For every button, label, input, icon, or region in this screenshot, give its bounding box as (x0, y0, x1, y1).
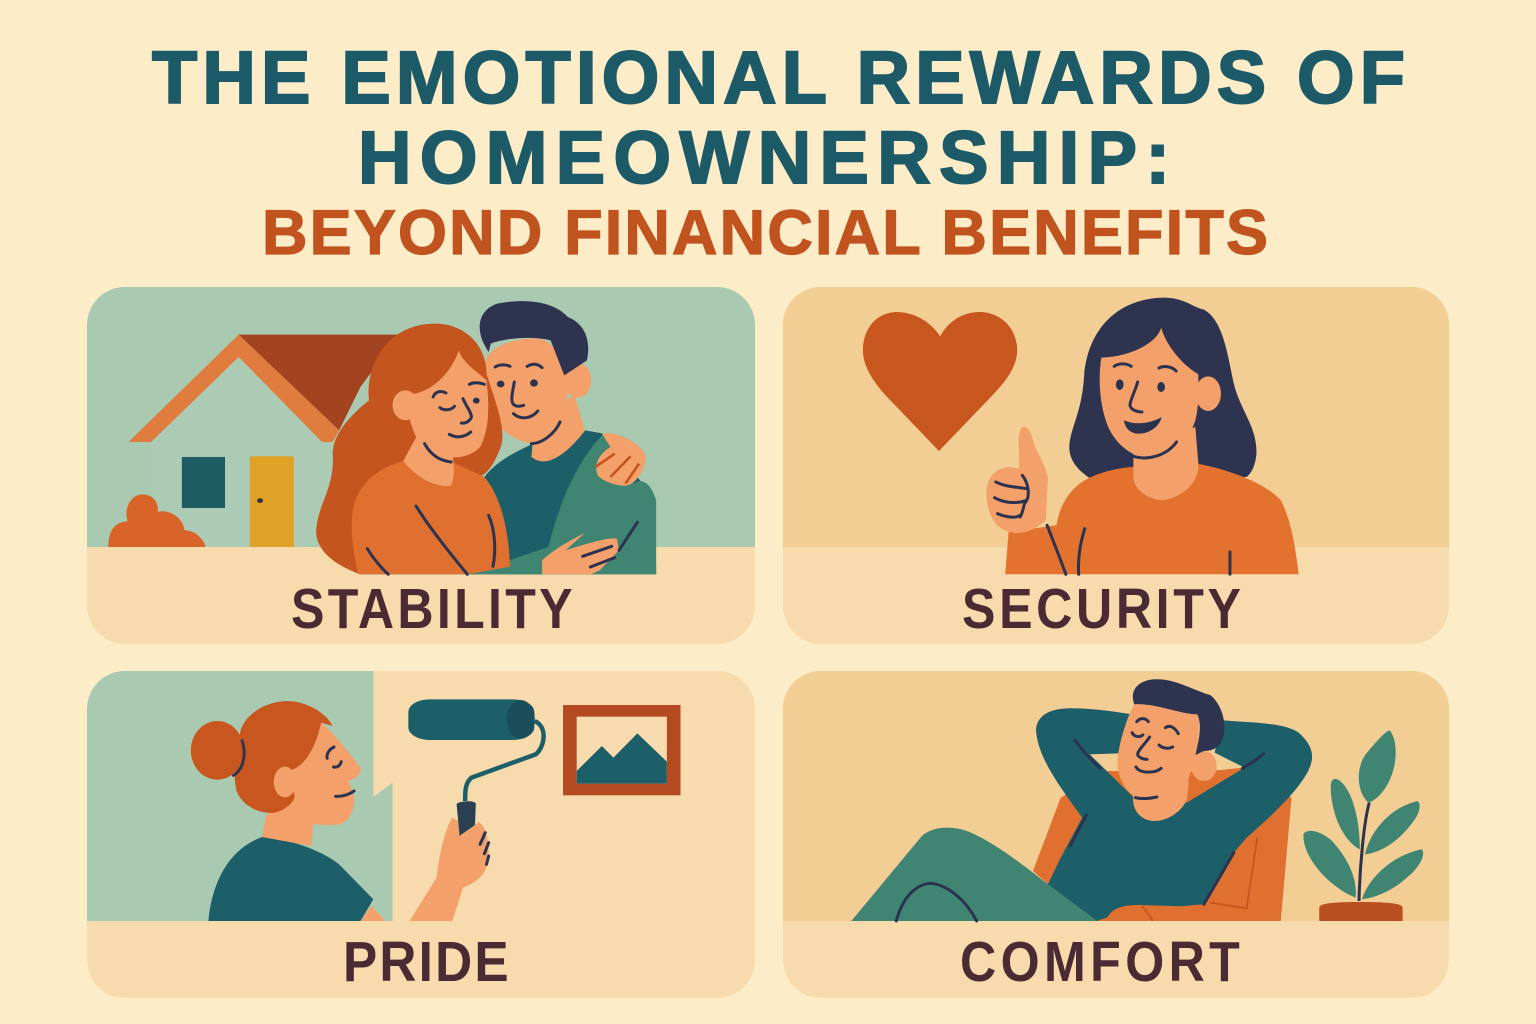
label: comfort: COMFORT (960, 930, 1240, 994)
panel: security (783, 287, 1449, 644)
label: security: SECURITY (962, 577, 1241, 641)
armrest (1107, 838, 1258, 922)
title (152, 36, 1405, 199)
label: stability: STABILITY (291, 577, 573, 641)
icon: framed picture (563, 705, 681, 795)
icon: thumbs up (986, 427, 1048, 533)
woman (1005, 298, 1299, 574)
subtitle: BEYOND FINANCIAL BENEFITS (262, 198, 1268, 268)
woman painting (191, 701, 385, 921)
hand on waist (467, 522, 637, 574)
panel: stability (87, 287, 755, 644)
teal wall (87, 671, 393, 921)
icon: paint roller (408, 699, 544, 921)
icon: potted plant (1303, 730, 1423, 921)
icon: house (128, 335, 399, 547)
title: HOMEOWNERSHIP: (358, 116, 1170, 199)
man relaxing (851, 679, 1312, 921)
hand on shoulder (595, 433, 646, 486)
panel: comfort (783, 671, 1449, 998)
woman (316, 324, 510, 574)
armchair (1033, 768, 1291, 921)
icon: bush (108, 494, 205, 547)
man (360, 301, 656, 574)
icon: heart (863, 312, 1017, 451)
panel: pride (87, 671, 755, 998)
title: THE EMOTIONAL REWARDS OF (152, 36, 1405, 119)
label: pride: PRIDE (343, 931, 509, 994)
